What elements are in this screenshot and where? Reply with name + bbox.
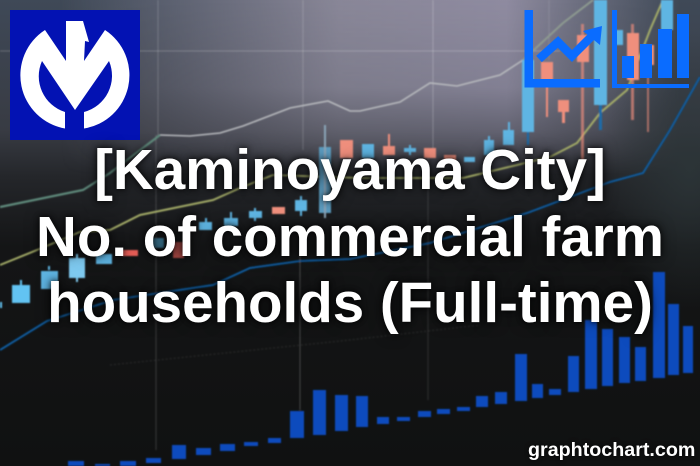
logo: city emblem	[10, 10, 140, 140]
icon: line chart with arrow	[524, 10, 602, 88]
title: households (Full-time)	[47, 271, 653, 334]
title: No. of commercial farm	[36, 204, 664, 268]
title	[32, 138, 664, 336]
icon: bar chart	[612, 10, 689, 88]
title: [Kaminoyama City]	[94, 138, 606, 201]
watermark: site name: graphtochart.com	[528, 439, 695, 461]
